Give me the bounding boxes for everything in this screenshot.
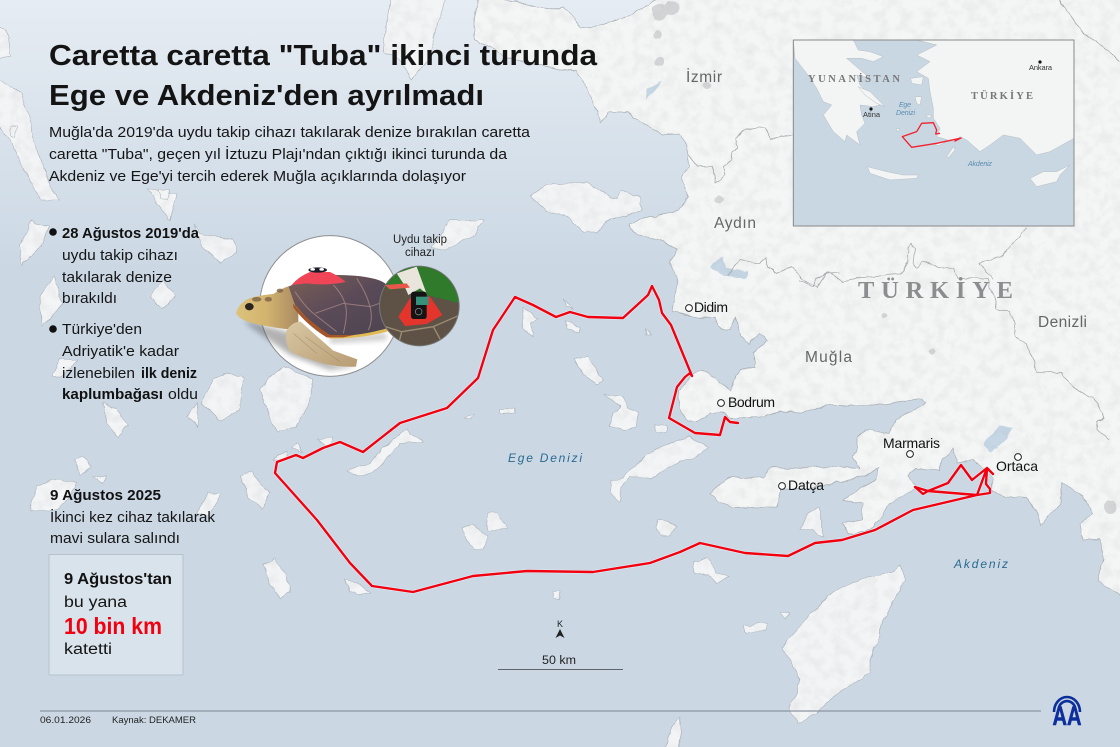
- province borders: [688, 0, 1120, 440]
- turtle shadow: [243, 320, 357, 370]
- intro text: Muğla'da 2019'da uydu takip cihazı takılarak denize bırakılan caretta: [49, 125, 531, 141]
- inset labels: Ege: [899, 102, 911, 109]
- title: Ege ve Akdeniz'den ayrılmadı: [49, 80, 484, 112]
- eye: [245, 303, 254, 310]
- inset labels: TÜRKİYE: [971, 89, 1033, 102]
- intro text: caretta "Tuba", geçen yıl İztuzu Plajı'ndan çıktığı ikinci turunda da: [49, 145, 508, 163]
- AA logo: AA: [1052, 701, 1082, 731]
- satellite device label: cihazı: [405, 247, 435, 259]
- text: 2025 release: mavi sulara salındı: [50, 531, 180, 547]
- region labels: TÜRKİYE: [858, 276, 1013, 304]
- compass and scale bar: [498, 619, 623, 670]
- text: 2025 release: [50, 488, 216, 547]
- turtle illustration: [236, 236, 463, 376]
- bullet: first turtle: kaplumbağası: [62, 387, 163, 403]
- footer text: [40, 715, 196, 726]
- shell rim: [293, 303, 354, 337]
- head scales: [252, 289, 283, 302]
- device photo: [379, 266, 460, 346]
- inset labels: Ankara: [1029, 63, 1053, 72]
- inset frame: [793, 40, 1074, 226]
- city markers: Didim: [694, 299, 728, 315]
- compass and scale bar: 50 km: [542, 655, 576, 667]
- city markers: [686, 299, 1038, 493]
- inset labels: YUNANİSTAN: [808, 73, 900, 85]
- footer rule: [40, 710, 1041, 712]
- region labels: Akdeniz: [953, 557, 1008, 571]
- bullet: 2019 release: uydu takip cihazı: [62, 248, 178, 264]
- city markers: Bodrum: [728, 394, 775, 410]
- lakes: [645, 82, 1013, 452]
- text: 2025 release: 9 Ağustos 2025: [50, 488, 161, 504]
- satellite device label: Uydu takip: [393, 234, 447, 246]
- region labels: Muğla: [805, 349, 852, 366]
- inset route: [902, 123, 962, 147]
- device marks: [310, 268, 324, 271]
- city markers: Ortaca: [996, 458, 1038, 474]
- footer text: Kaynak: DEKAMER: [112, 715, 196, 726]
- red tag patch: [292, 272, 346, 285]
- region labels: İzmir: [686, 68, 722, 86]
- bullet: 2019 release: bırakıldı: [62, 291, 117, 307]
- title: Caretta caretta "Tuba" ikinci turunda: [49, 40, 598, 72]
- intro text: Akdeniz ve Ege'yi tercih ederek Muğla açıklarında dolaşıyor: [49, 169, 466, 185]
- mainland Türkiye: [474, 0, 1120, 604]
- region labels: Ege Denizi: [508, 451, 582, 465]
- inset labels: Denizi: [896, 110, 915, 117]
- bullet: first turtle: Türkiye'den: [62, 322, 142, 338]
- device: [308, 267, 327, 273]
- bullet: first turtle: [49, 322, 198, 403]
- bullet: first turtle: oldu: [168, 387, 198, 403]
- title: [49, 40, 598, 112]
- white circle: [260, 236, 400, 376]
- inset labels: Atina: [863, 110, 881, 119]
- urban patches: [652, 1, 1117, 514]
- bullet: first turtle: ilk deniz: [141, 366, 197, 382]
- bullet: 2019 release: [49, 226, 200, 307]
- inset labels: [808, 60, 1053, 168]
- shell: [289, 275, 391, 336]
- turtle head and neck: [236, 286, 298, 330]
- region labels: [508, 68, 1087, 571]
- bullet: first turtle: izlenebilen: [62, 366, 135, 382]
- inset land: [793, 40, 1074, 187]
- distance callout box: 10 bin km: [64, 613, 162, 639]
- shell scutes: [295, 278, 389, 333]
- inset locator map: [793, 40, 1074, 226]
- city markers: Datça: [788, 477, 824, 493]
- distance callout box: bu yana: [64, 594, 127, 611]
- shell underside: [293, 303, 387, 338]
- footer text: 06.01.2026: [40, 715, 91, 726]
- bullet: 2019 release: takılarak denize: [62, 270, 172, 286]
- region labels: Aydın: [714, 215, 756, 232]
- distance callout box: 9 Ağustos'tan: [64, 571, 172, 588]
- city markers: Marmaris: [883, 435, 940, 451]
- intro text: [49, 125, 531, 185]
- compass and scale bar: K: [557, 619, 563, 629]
- distance callout box: [49, 554, 183, 675]
- satellite device label: [393, 234, 447, 259]
- route of turtle Tuba: [275, 286, 993, 592]
- inset sea: [793, 40, 1074, 226]
- bullet: first turtle: Adriyatik'e kadar: [62, 344, 179, 360]
- front flipper: [286, 322, 357, 367]
- bullet: 2019 release: 28 Ağustos 2019'da: [62, 226, 200, 242]
- region labels: Denizli: [1038, 314, 1087, 331]
- AA logo: [1052, 697, 1082, 731]
- distance callout box: katetti: [64, 641, 112, 658]
- inset labels: Akdeniz: [967, 161, 992, 168]
- flipper detail: [293, 333, 340, 362]
- rear shell shadow: [330, 333, 387, 343]
- text: 2025 release: İkinci kez cihaz takılarak: [50, 508, 216, 526]
